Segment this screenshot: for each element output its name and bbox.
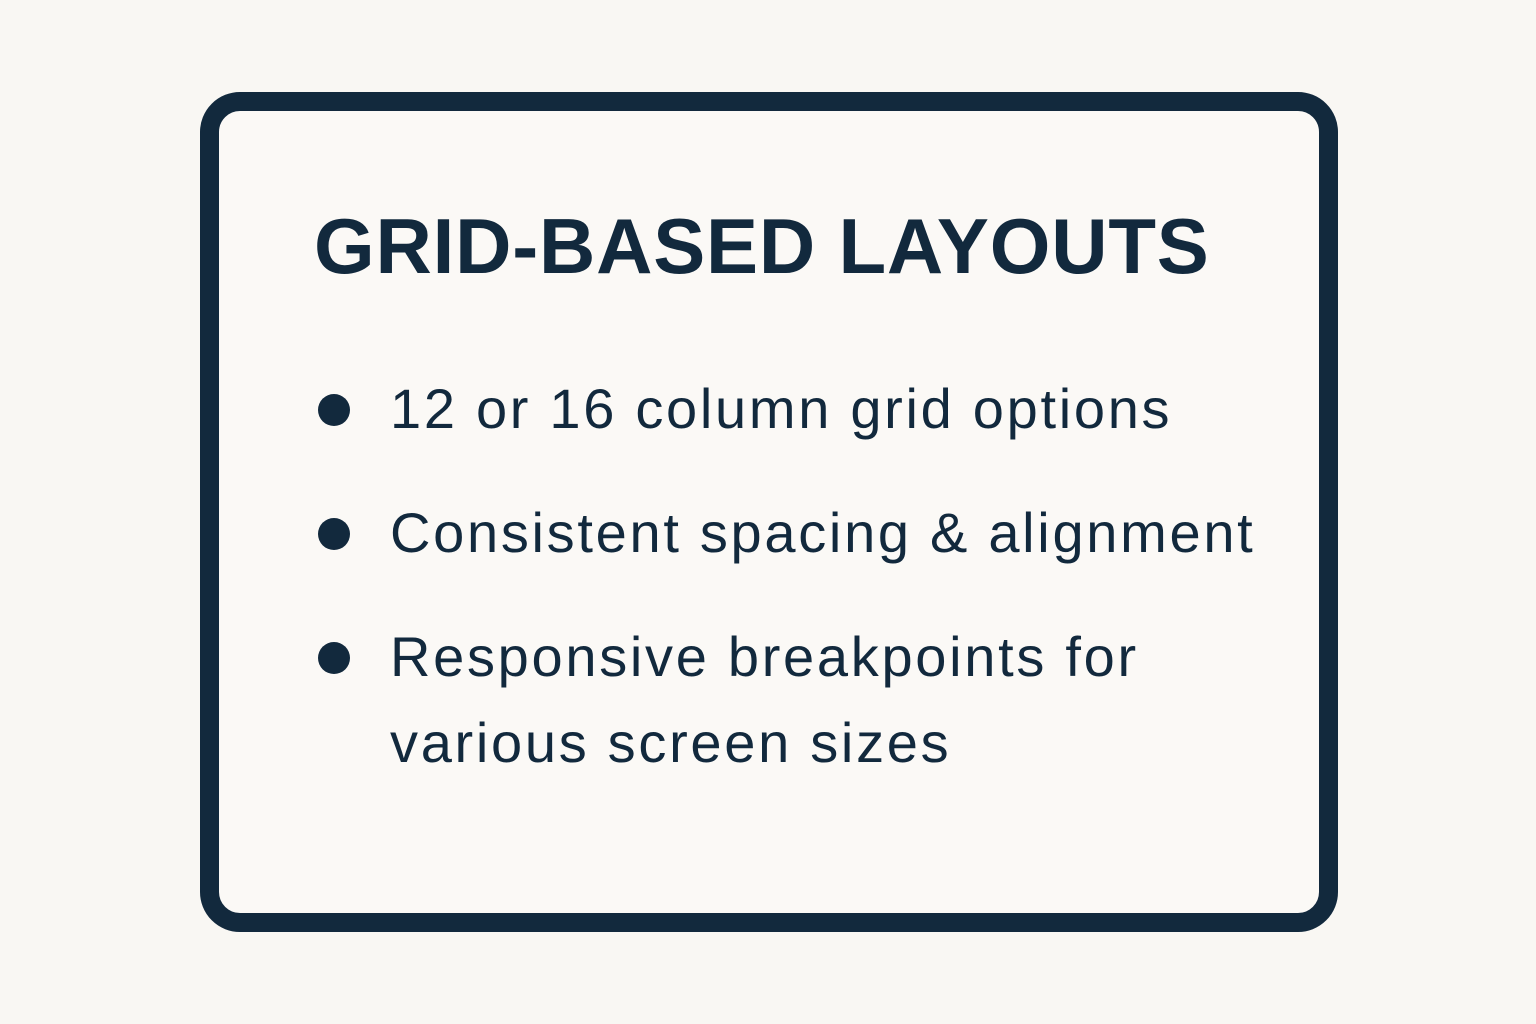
bullet item 1: 12 or 16 column grid options (390, 377, 1172, 440)
bullet item 3: Responsive breakpoints for (390, 625, 1139, 688)
bullet item 2: Consistent spacing & alignment (390, 501, 1255, 564)
title: GRID-BASED LAYOUTS (314, 202, 1210, 290)
panel: grid-based layouts card (200, 92, 1338, 932)
bullet item 3 (318, 625, 1139, 774)
bullet item 3: various screen sizes (390, 711, 951, 774)
